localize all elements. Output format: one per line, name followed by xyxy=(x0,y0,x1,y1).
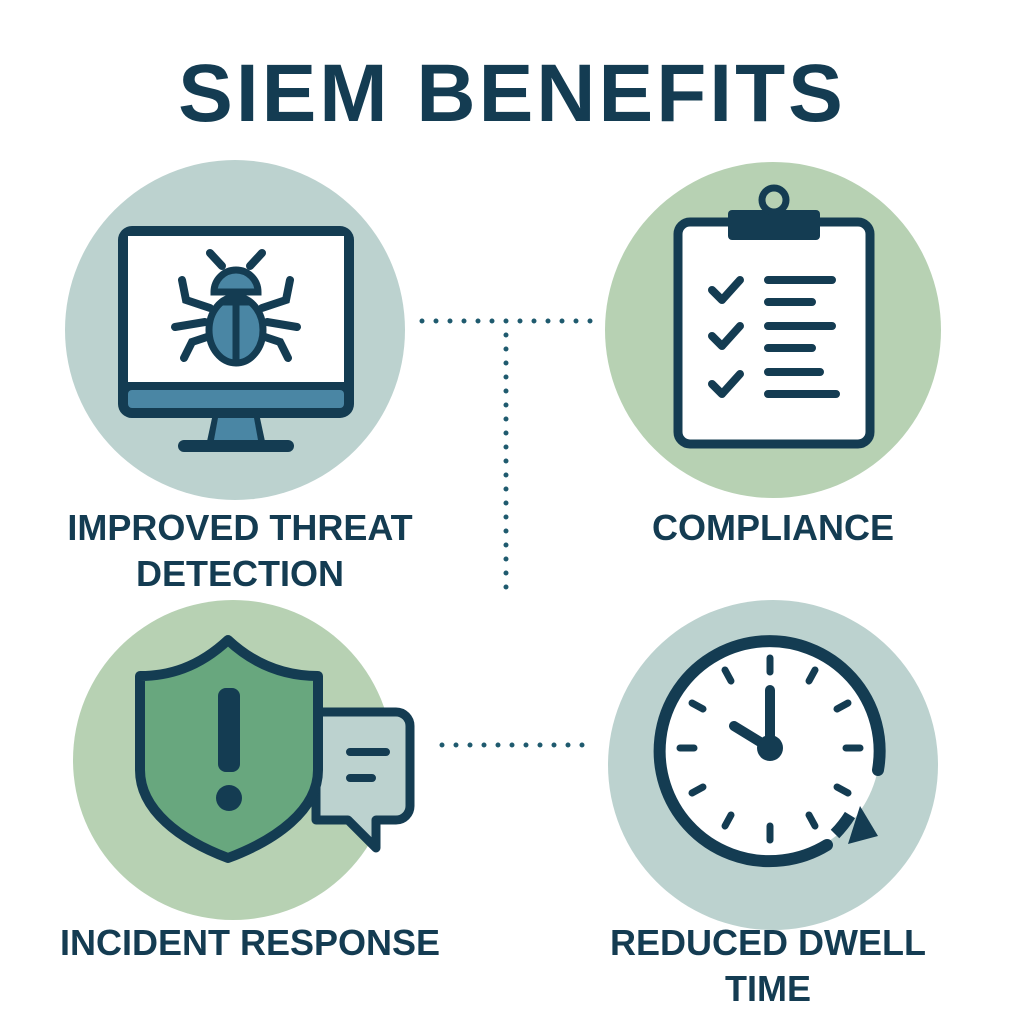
bug xyxy=(175,253,297,358)
label: improved threat detection: IMPROVED THREAT xyxy=(67,507,413,548)
panel: dwell time icon xyxy=(608,600,938,930)
panel: threat detection icon xyxy=(65,160,405,500)
label: incident response: INCIDENT RESPONSE xyxy=(60,922,440,963)
label: improved threat detection xyxy=(67,507,413,594)
label: reduced dwell time: REDUCED DWELL xyxy=(610,922,926,963)
connectors xyxy=(422,321,592,745)
panel: compliance icon xyxy=(605,162,941,498)
panel: incident response icon xyxy=(73,600,410,920)
label: reduced dwell time xyxy=(610,922,926,1009)
label: compliance: COMPLIANCE xyxy=(652,507,894,548)
label: reduced dwell time: TIME xyxy=(725,968,811,1009)
label: improved threat detection: DETECTION xyxy=(136,553,344,594)
title: SIEM BENEFITS xyxy=(178,48,846,139)
